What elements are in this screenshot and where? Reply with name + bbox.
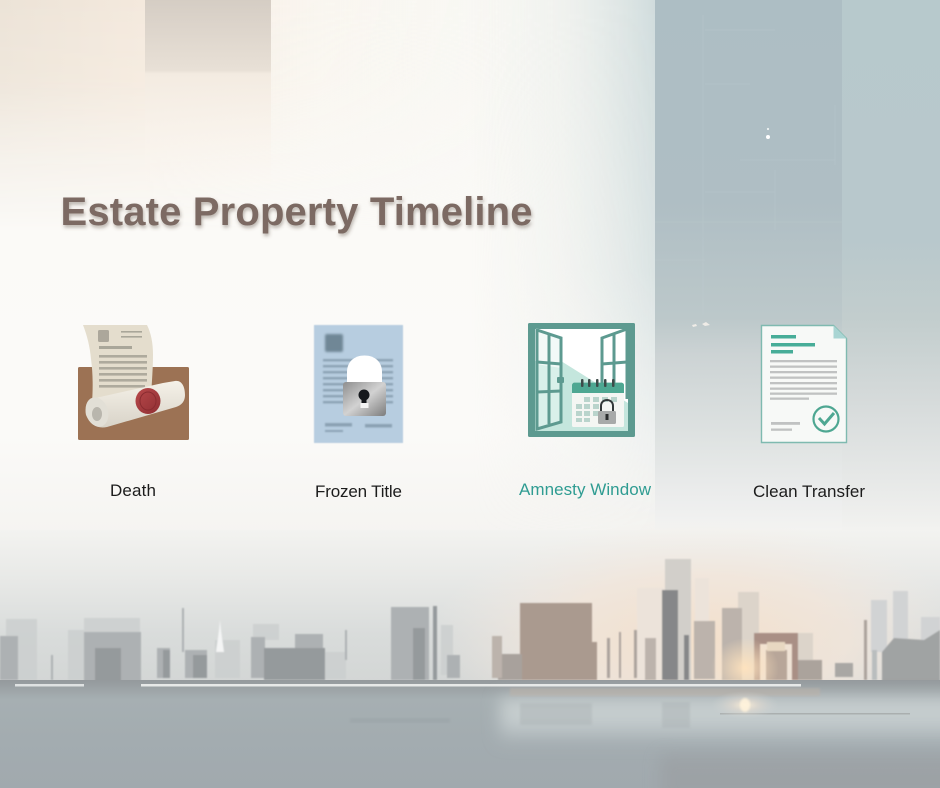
icon detail: calendar [572, 383, 624, 427]
icon: blurred document with padlock [314, 325, 403, 443]
icon: open window with calendar and padlock [528, 323, 635, 437]
icon detail: right shutter [602, 329, 627, 399]
label: Frozen Title: Frozen Title [315, 482, 402, 501]
icon: scroll with wax seal [78, 325, 189, 440]
skyline: warm buildings [665, 559, 691, 681]
band: tan column top left [145, 0, 271, 200]
step 3: Amnesty Window [519, 323, 652, 499]
step 4: Clean Transfer [753, 326, 865, 501]
icon detail: red wax seal [136, 388, 160, 414]
band: lower haze [0, 530, 940, 690]
icon detail: check badge [814, 406, 838, 432]
icon detail: small padlock [601, 400, 613, 412]
label: Clean Transfer: Clean Transfer [753, 482, 865, 501]
water [0, 680, 940, 788]
step 1: Death [78, 325, 189, 500]
icon detail: left shutter [536, 328, 561, 429]
band: pale blue gradient beside column [542, 0, 655, 470]
step 2: Frozen Title [314, 325, 403, 501]
band: right edge column [842, 0, 940, 530]
label: Amnesty Window: Amnesty Window [519, 480, 652, 499]
label: Death: Death [110, 481, 156, 500]
title: Estate Property Timeline [60, 190, 532, 234]
skyline: gate building [754, 633, 798, 680]
band: warm sunset glow [430, 520, 940, 760]
band: peach wash top left [0, 0, 307, 178]
icon: approved document with check mark [762, 326, 846, 442]
band: blue column top right [655, 0, 842, 530]
sun glow on horizon [711, 638, 779, 698]
skyline: city silhouettes [0, 559, 940, 684]
icon detail: padlock [347, 356, 382, 384]
